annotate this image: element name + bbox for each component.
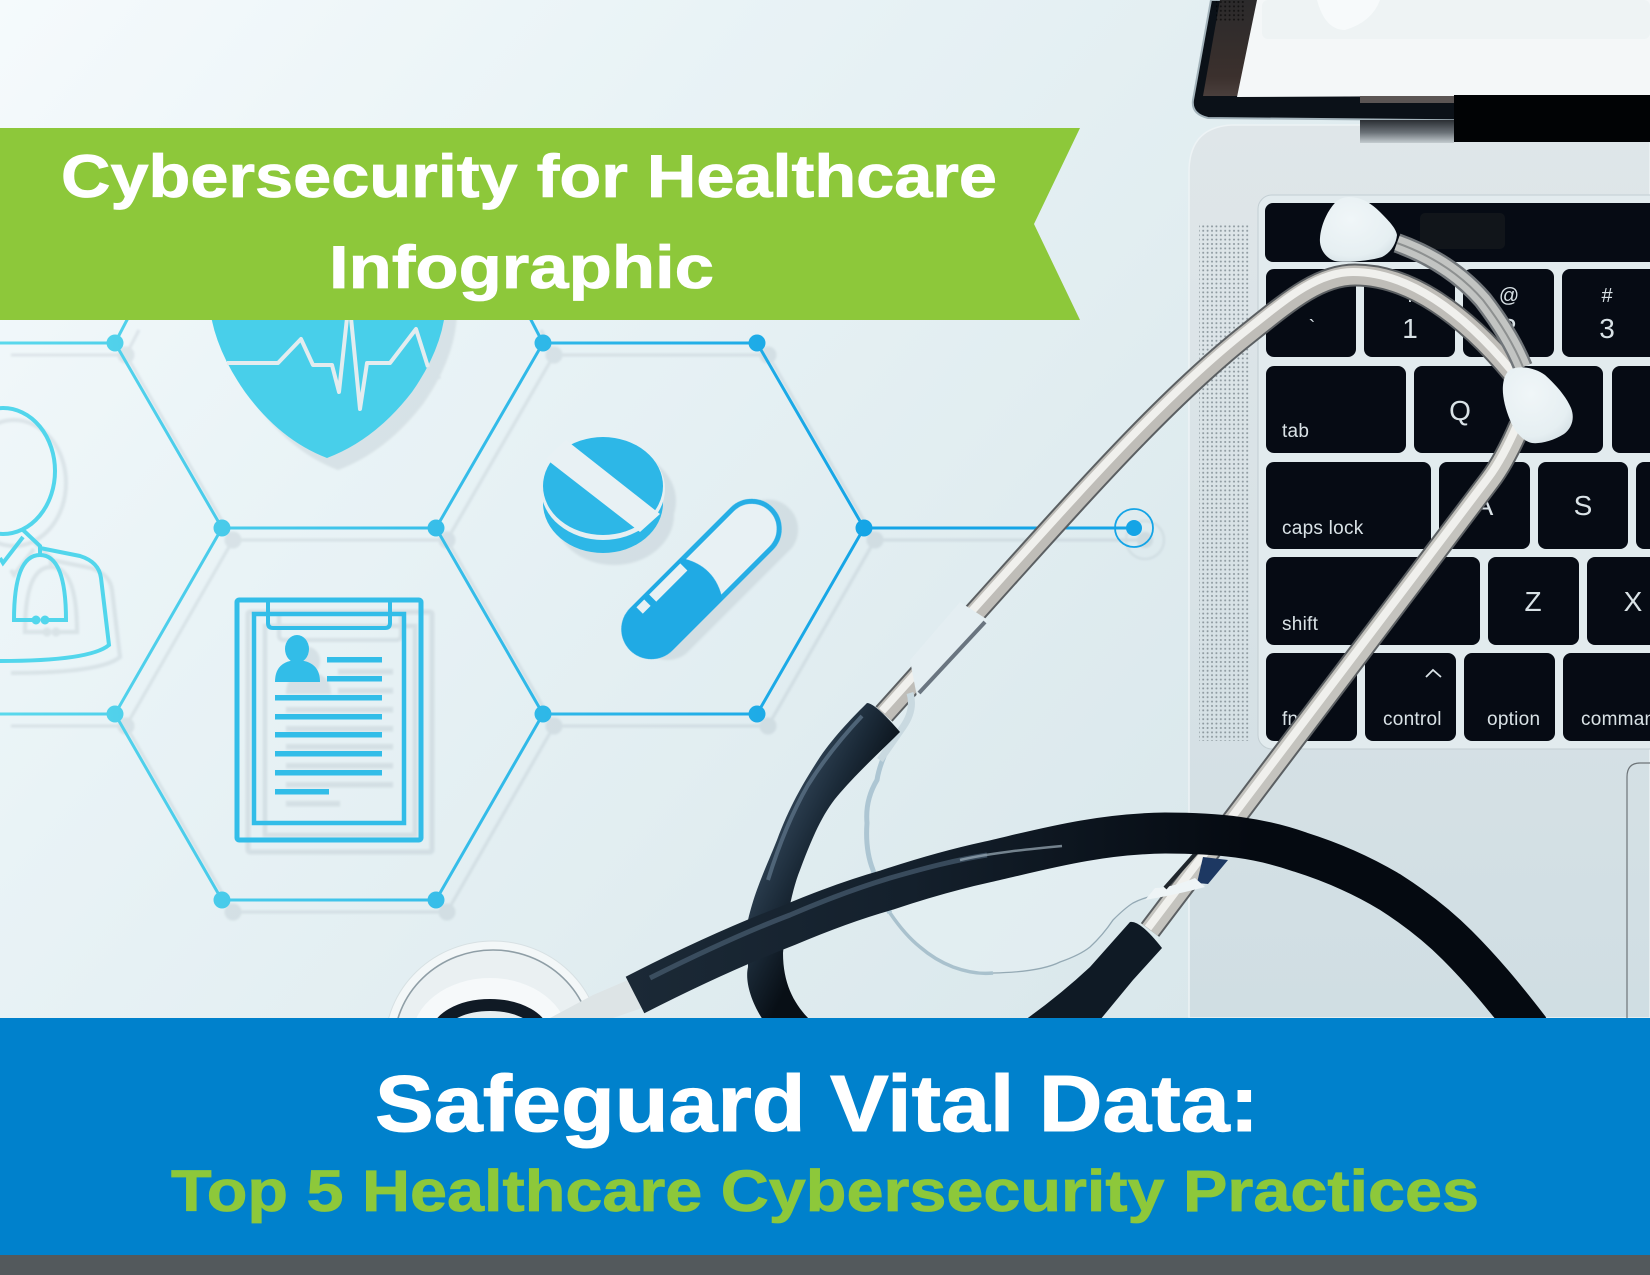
key labels: 1 (1402, 313, 1418, 344)
chest piece stem (550, 980, 642, 1018)
key labels: 3 (1599, 313, 1615, 344)
footer panel (0, 1018, 1650, 1275)
title banner (0, 128, 1080, 320)
clear membrane (867, 730, 1205, 973)
right arm chrome sleeve (1145, 852, 1228, 900)
key labels: A (1475, 490, 1494, 521)
laptop body (1189, 125, 1650, 1018)
photo: stethoscope (385, 197, 1573, 1149)
key labels: S (1574, 490, 1592, 521)
hexagon network (0, 318, 1153, 908)
lower right rubber tube (1025, 922, 1162, 1020)
key labels: fn (1282, 709, 1298, 730)
earpiece front (1503, 367, 1573, 443)
keys (1265, 203, 1650, 741)
key labels: tab (1282, 421, 1309, 442)
title line one: Cybersecurity for Healthcare (61, 143, 997, 210)
title line two: Infographic (329, 234, 714, 301)
hexagon lines (0, 318, 1134, 900)
key labels: @ (1499, 285, 1519, 307)
key labels: control (1383, 709, 1442, 730)
banner ribbon (0, 128, 1080, 320)
tube sleeve (880, 602, 988, 760)
icon: doctor (0, 408, 109, 661)
subheading: Top 5 Healthcare Cybersecurity Practices (171, 1159, 1479, 1224)
key labels: Q (1449, 395, 1471, 426)
photo: laptop (1189, 0, 1650, 1018)
icon: tablet pill (541, 437, 665, 553)
network end target (1115, 509, 1153, 547)
icon: medical record clipboard (237, 600, 421, 840)
touch bar detail (1420, 213, 1505, 249)
key labels: # (1601, 285, 1613, 307)
metal tube: left arm (882, 272, 1513, 714)
key labels: shift (1282, 614, 1319, 635)
back left rubber tube (747, 703, 900, 1020)
heading: Safeguard Vital Data: (375, 1059, 1259, 1148)
key labels: ! (1407, 285, 1413, 307)
laptop lid and screen (1193, 0, 1650, 122)
key labels: caps lock (1282, 518, 1364, 539)
icon: heart rate shield (209, 300, 446, 458)
metal tube: right arm (1148, 423, 1520, 930)
key labels: ` (1309, 317, 1315, 339)
trackpad (1627, 763, 1650, 1018)
hexagon nodes (106, 334, 872, 908)
earpiece back (1320, 197, 1397, 262)
key labels (1282, 285, 1650, 730)
key labels: 2 (1501, 313, 1517, 344)
blue band (0, 1018, 1650, 1255)
main rubber tube (635, 833, 1530, 1030)
icon: capsule (609, 486, 794, 672)
laptop hinge (1360, 95, 1650, 143)
chest piece (385, 941, 601, 1149)
key labels: option (1487, 709, 1540, 730)
keyboard well (1258, 195, 1650, 749)
grey base strip (0, 1255, 1650, 1275)
key labels: X (1624, 586, 1643, 617)
key labels: Z (1524, 586, 1542, 617)
speaker grille (1199, 223, 1249, 741)
metal tube: back earpiece arm (1397, 243, 1523, 367)
